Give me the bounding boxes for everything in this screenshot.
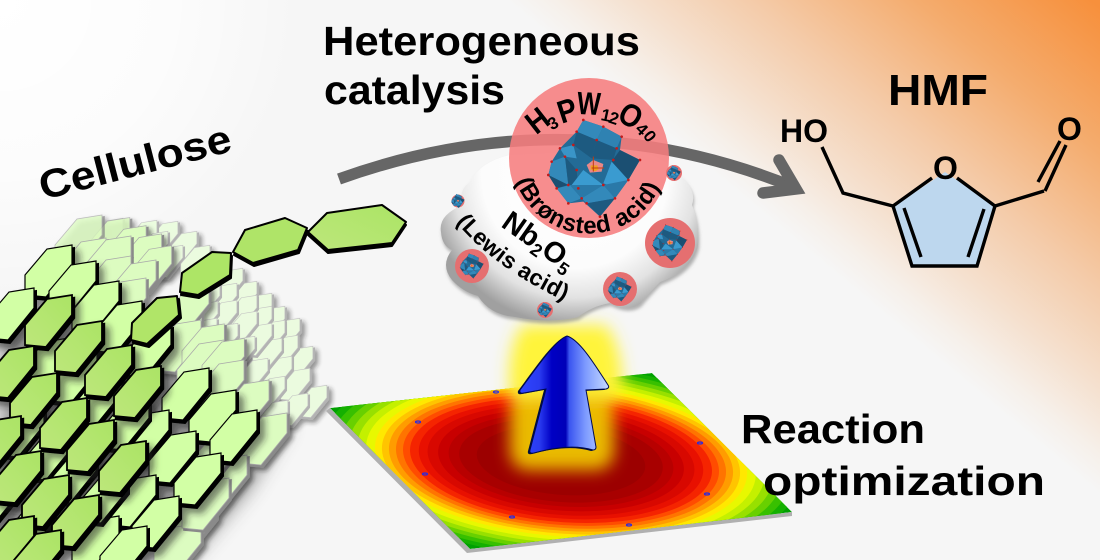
label: H3PW12O40: 2 xyxy=(606,108,621,129)
label: H3PW12O40: 3 xyxy=(545,113,562,134)
heading: Cellulose: Cellulose xyxy=(34,117,236,209)
molecule: HMF structure: O xyxy=(1057,111,1082,147)
heading: Reaction optimization xyxy=(741,406,1045,504)
label: H3PW12O40: 1 xyxy=(599,105,613,126)
label: Nb2O5: Nb xyxy=(496,206,546,254)
contour plot: reaction optimization surface xyxy=(326,373,792,553)
grey reaction arrow xyxy=(339,140,796,193)
heading: Heterogeneous catalysis: Heterogeneous xyxy=(323,18,640,64)
label: H3PW12O40: 0 xyxy=(639,127,660,146)
hexagon chain leaving the crystal xyxy=(131,205,406,347)
label: H3PW12O40: P xyxy=(553,92,582,131)
sheet edge thickness xyxy=(326,408,792,553)
polyoxometalate cluster xyxy=(547,119,641,218)
heading: Heterogeneous catalysis: catalysis xyxy=(324,67,505,113)
mid grey-outlined hexagon layer xyxy=(55,215,289,560)
heading: Reaction optimization: optimization xyxy=(763,458,1045,504)
label: H3PW12O40: 4 xyxy=(632,119,652,140)
label: Lewis acid: (Lewis acid) xyxy=(455,214,568,304)
heading: HMF: HMF xyxy=(888,66,988,115)
label: Nb2O5: 5 xyxy=(553,258,573,280)
cellulose crystal stack of hexagons xyxy=(0,205,406,560)
far fading hexagon layer xyxy=(94,218,328,434)
small supported clusters xyxy=(451,165,695,318)
atom labels: HO xyxy=(780,113,828,149)
label: H3PW12O40: O xyxy=(612,96,649,137)
label: H3PW12O40: W xyxy=(576,86,602,123)
label: H3PW12O40 xyxy=(519,86,660,146)
blue up arrow xyxy=(518,336,609,454)
soft stack shadow xyxy=(0,320,290,560)
yellow glow above the optimum xyxy=(509,325,622,470)
molecule: HMF structure: O xyxy=(933,150,958,186)
cloud: Nb2O5 support xyxy=(441,150,698,320)
pink circle: H3PW12O40 xyxy=(509,78,669,238)
heading: Reaction optimization: Reaction xyxy=(741,406,925,452)
contour bands xyxy=(330,373,792,549)
label: H3PW12O40: H xyxy=(519,101,557,141)
dark green front hexagon layer xyxy=(0,295,163,560)
label: Nb2O5: 2 xyxy=(527,239,546,261)
heading: Heterogeneous catalysis xyxy=(323,18,640,113)
light green outlined hexagon layer xyxy=(0,245,259,560)
label: Brønsted acid: (Brønsted acid) xyxy=(513,178,662,234)
design-point markers xyxy=(416,391,710,526)
furan ring xyxy=(893,172,995,266)
molecule: HMF structure xyxy=(780,111,1082,266)
label: Nb2O5: O xyxy=(536,233,573,273)
